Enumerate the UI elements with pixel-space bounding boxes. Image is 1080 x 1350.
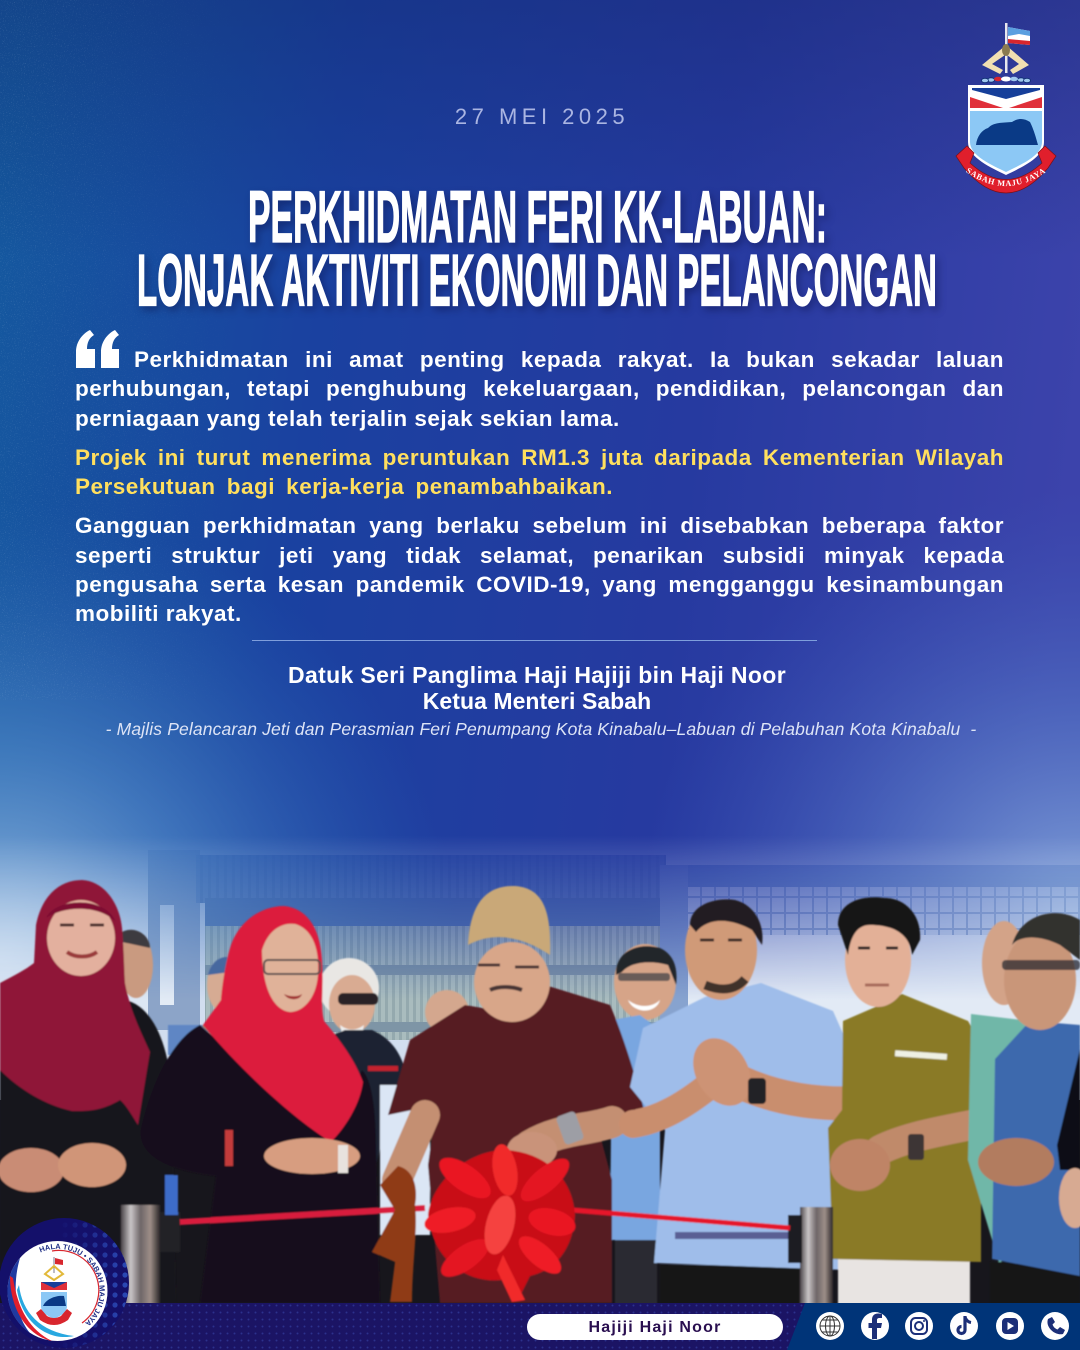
background man cap [168, 957, 237, 1055]
icon: phone [1041, 1312, 1069, 1340]
background man glasses left [119, 930, 153, 998]
icon: youtube [996, 1312, 1024, 1340]
man with glasses behind [610, 944, 677, 1305]
state crest: SABAH MAJU JAYA [966, 168, 1046, 186]
speaker name and role [288, 662, 786, 714]
name pill [527, 1314, 783, 1340]
icon: instagram [905, 1312, 933, 1340]
man in light blue shirt [630, 899, 875, 1307]
quote: paragraph three [75, 513, 1004, 626]
man in olive shirt [828, 897, 1005, 1306]
footer band navy [0, 1303, 810, 1350]
woman red hijab [141, 906, 380, 1303]
badge: Hala Tuju: HALA TUJU • SABAH MAJU JAYA [39, 1244, 105, 1326]
quote: paragraph one [75, 347, 1004, 431]
quote: highlighted paragraph: Persekutuan bagi kerja-kerja penambahbaikan. [75, 474, 613, 499]
man with white hair [319, 958, 430, 1235]
icon: facebook [861, 1312, 889, 1340]
speaker name and role: Ketua Menteri Sabah [423, 688, 651, 714]
event caption: - Majlis Pelancaran Jeti dan Perasmian Feri Penumpang Kota Kinabalu–Labuan di Pelabuhan Kota Kinabalu - [106, 719, 976, 739]
photo: building background [0, 820, 1080, 1310]
date: 27 MEI 2025 [455, 104, 629, 129]
footer [0, 1218, 1080, 1350]
quote: paragraph three: seperti struktur jeti yang tidak selamat, penarikan subsidi minyak kepada [75, 543, 1004, 568]
footer band blue [787, 1303, 1080, 1350]
ribbon posts [121, 1175, 833, 1307]
man behind centre [425, 990, 469, 1034]
speaker name and role: Datuk Seri Panglima Haji Hajiji bin Haji Noor [288, 662, 786, 688]
centre man in maroon shirt [388, 886, 645, 1303]
photo: people and ribbon [0, 880, 1080, 1307]
quote: highlighted paragraph: Projek ini turut menerima peruntukan RM1.3 juta daripada Kementerian Wilayah [75, 445, 1004, 470]
quote: paragraph one: perhubungan, tetapi penghubung kekeluargaan, pendidikan, pelancongan dan [75, 376, 1004, 401]
icon: website globe [816, 1312, 844, 1340]
quote: paragraph one: perniagaan yang telah terjalin sejak sekian lama. [75, 406, 620, 431]
name pill: Hajiji Haji Noor [588, 1319, 722, 1336]
state crest [956, 23, 1056, 194]
quote: paragraph three: pengusaha serta kesan pandemik COVID-19, yang mengganggu kesinambungan [75, 572, 1004, 597]
icon: opening quote mark [76, 330, 119, 368]
quote: highlighted paragraph [75, 445, 1004, 499]
red ribbon and bow [180, 1142, 790, 1302]
icon: tiktok [950, 1312, 978, 1340]
men at right edge [968, 913, 1080, 1307]
quote: paragraph three: Gangguan perkhidmatan yang berlaku sebelum ini disebabkan beberapa faktor [75, 513, 1004, 538]
quote: paragraph one: Perkhidmatan ini amat penting kepada rakyat. Ia bukan sekadar laluan [134, 347, 1004, 372]
quote: paragraph three: mobiliti rakyat. [75, 601, 242, 626]
woman maroon hijab [0, 880, 176, 1303]
badge: Hala Tuju [0, 1218, 129, 1348]
